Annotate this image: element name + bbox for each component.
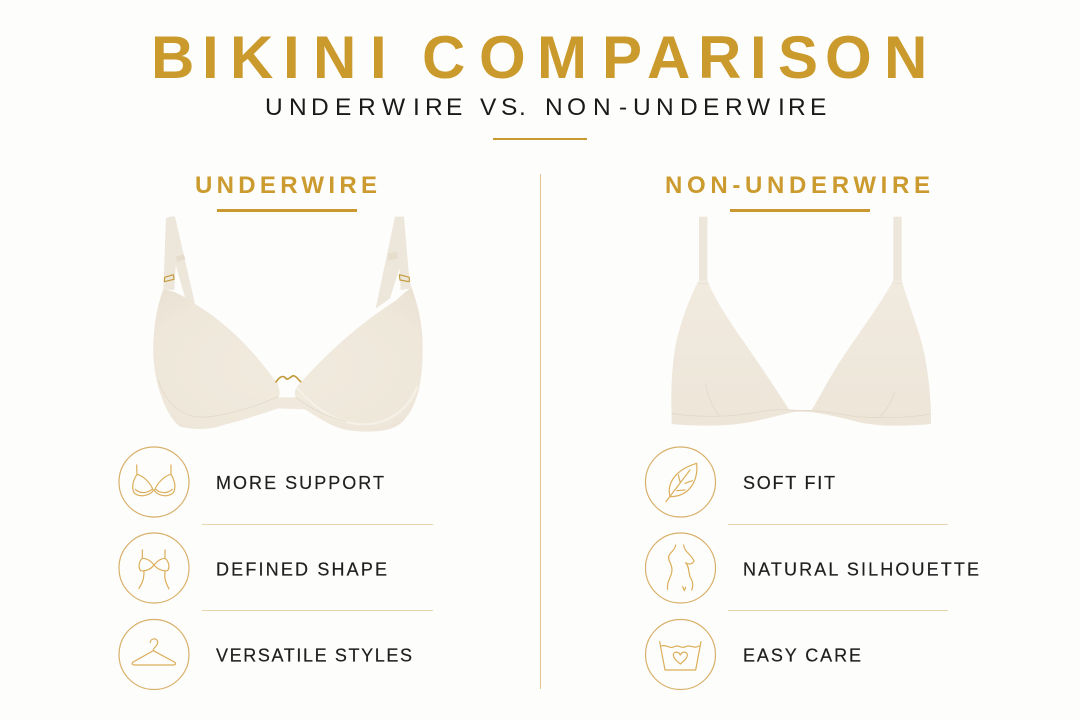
underwire bikini top bbox=[153, 216, 423, 432]
label: defined shape: DEFINED SHAPE bbox=[216, 560, 387, 580]
icon: defined shape bbox=[119, 533, 189, 603]
column divider bbox=[540, 174, 541, 689]
heading rule bbox=[730, 209, 870, 212]
feature list: non-underwire bbox=[646, 447, 979, 690]
subtitle: UNDERWIRE VS. NON-UNDERWIRE bbox=[265, 94, 826, 121]
icon: feather bbox=[646, 447, 716, 517]
heading: underwire: UNDERWIRE bbox=[195, 172, 377, 199]
non-underwire bikini top bbox=[671, 217, 931, 426]
label: soft fit: SOFT FIT bbox=[743, 473, 835, 493]
icon: bra bbox=[119, 447, 189, 517]
title rule bbox=[493, 138, 587, 140]
heading rule bbox=[217, 209, 357, 212]
icon: wash basin with heart bbox=[646, 620, 716, 690]
icon: hanger bbox=[119, 620, 189, 690]
panel: underwire bbox=[119, 172, 433, 690]
label: more support: MORE SUPPORT bbox=[216, 473, 384, 493]
icon: silhouette bbox=[646, 533, 716, 603]
label: versatile styles: VERSATILE STYLES bbox=[216, 646, 412, 666]
title: BIKINI COMPARISON bbox=[151, 24, 927, 91]
panel: non-underwire bbox=[646, 172, 979, 690]
label: natural silhouette: NATURAL SILHOUETTE bbox=[743, 560, 979, 580]
feature list: underwire bbox=[119, 447, 433, 690]
heading: non-underwire: NON-UNDERWIRE bbox=[665, 172, 930, 199]
label: easy care: EASY CARE bbox=[743, 646, 861, 666]
